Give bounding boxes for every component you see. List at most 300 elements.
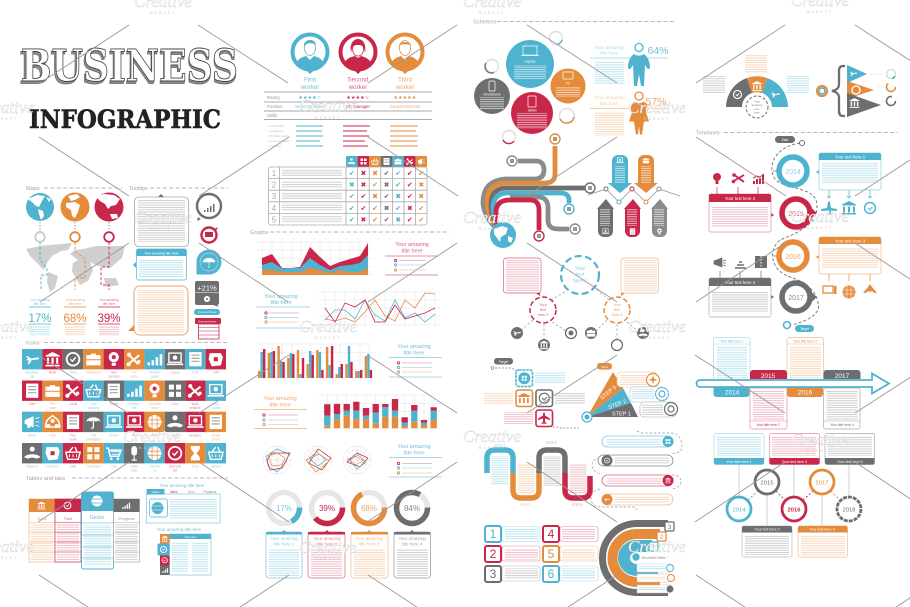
labels row 1: Idea [111, 370, 117, 374]
card 3 [351, 530, 388, 578]
triangle steps: STEP 1 [612, 412, 631, 418]
worker: first: First [304, 76, 316, 84]
row numbers: 2 [272, 180, 277, 190]
heading: Tooltips: Tooltips [129, 186, 148, 192]
box: text 4 [798, 526, 848, 557]
labels row 3: protection [86, 438, 101, 442]
watermark stamps: MARKET [644, 556, 670, 560]
labels row 4: Cart [70, 464, 76, 468]
check marks: ✖ [349, 181, 355, 189]
labels row 4: list [173, 468, 177, 472]
table grid [268, 167, 427, 225]
card 2: title here 2 [316, 542, 338, 546]
ring [817, 86, 827, 96]
watermark stamps: MARKET [315, 116, 341, 120]
dashed surround [591, 431, 682, 510]
table column: blue highlighted: Globe [90, 515, 104, 521]
donut: 68%: 68% [361, 504, 377, 513]
row numbers [272, 169, 277, 224]
snake text blocks: STEP 1 [495, 444, 506, 448]
watermark stamps: MARKET [644, 336, 670, 340]
labels row 1 [26, 370, 219, 378]
dashed circle: text 3: Your [613, 303, 622, 307]
ring 2015: 2015 [788, 211, 804, 218]
labels row 1: price [131, 374, 138, 378]
box: text 5 [825, 434, 874, 464]
row numbers: 4 [272, 204, 277, 213]
watermark stamps: Creative [628, 317, 686, 336]
start pill [775, 136, 804, 146]
check marks: ✔ [395, 170, 401, 178]
watermark stamps: Creative [463, 208, 521, 227]
worker: second: worker [348, 84, 367, 91]
radar chart 2 [304, 446, 332, 474]
callout: +21%: +21% [197, 284, 217, 292]
box: text 1: Your text here 1 [726, 460, 752, 464]
check marks: ✔ [384, 193, 390, 201]
donut: 68% [354, 492, 384, 524]
legend: area chart: title here [401, 248, 423, 254]
labels row 2: shipping [88, 406, 100, 410]
stacked bar chart [318, 395, 440, 428]
positions: Senior Designer [295, 104, 326, 109]
labels row 2: Your [213, 402, 220, 406]
check marks: ✔ [372, 204, 378, 212]
box: text 2: Your text here 2 [754, 528, 780, 532]
check marks: ✖ [418, 181, 424, 189]
check marks: ✔ [407, 170, 413, 178]
map connectors [40, 242, 109, 290]
labels row 3: News [28, 434, 36, 438]
item 1: 1 [490, 527, 497, 541]
area chart [257, 242, 373, 275]
stat: 57%: 57% [645, 96, 667, 108]
small rings [485, 32, 574, 144]
legend: line chart: Your amazing [264, 294, 298, 300]
icon row 4 [22, 443, 226, 463]
heading: Timelines: Timelines [696, 130, 720, 136]
arc number tags: 3 [668, 525, 672, 531]
panel: device circles [474, 32, 586, 144]
labels row 4: Calculator [86, 464, 102, 468]
panel: numbered list [485, 526, 598, 582]
legend: stacked chart [254, 396, 307, 428]
card 4 [394, 530, 430, 578]
labels row 3: Smart [212, 434, 220, 438]
labels row 2: Wallet [110, 402, 118, 406]
item 4: 4 [548, 527, 555, 541]
heading: Maps: Maps [26, 186, 40, 192]
watermark stamps: Creative [299, 317, 357, 336]
worker table labels: Position [267, 104, 283, 109]
labels row 1: Time [70, 370, 77, 374]
year 2017 tab: 2017 [835, 373, 850, 380]
legend: line chart [256, 294, 310, 328]
check marks: ✔ [418, 204, 424, 212]
labels row 4: Discount [169, 464, 181, 468]
donut: 39%: 39% [319, 504, 335, 513]
heading: Icons: Icons [26, 340, 40, 346]
labels row 3: Gold [49, 434, 56, 438]
row text [282, 169, 342, 222]
label: orange pill [597, 363, 612, 370]
panel: maps [26, 192, 125, 336]
labels row 1: percent [109, 374, 119, 378]
box: text 2 [742, 526, 792, 557]
watermark stamps: MARKET [315, 336, 341, 340]
worker: second [340, 34, 376, 91]
vertical tabs [157, 527, 211, 575]
snake text blocks: STEP 3 [546, 441, 557, 445]
pill: blue [602, 436, 674, 447]
pill: orange [602, 494, 673, 505]
row numbers: 1 [272, 169, 277, 178]
node 2015: 2015 [761, 480, 773, 486]
check marks: ✔ [407, 193, 413, 201]
box: title 4: Your title here 4 [830, 423, 854, 427]
icons: gray [714, 256, 767, 278]
worker table labels: Rating [267, 95, 280, 100]
skills labels: • Problem solving [268, 134, 290, 138]
title: Infographic: INFOGRAPHIC [29, 105, 221, 134]
item 5: 5 [548, 547, 555, 561]
dashed route [772, 143, 818, 325]
box: title 2 [750, 388, 787, 429]
watermark stamps: MARKET [479, 446, 505, 450]
arrow: orange down [634, 155, 658, 193]
positions [295, 104, 421, 109]
labels row 2: result [151, 406, 159, 410]
box: text 5: Your text here 5 [837, 460, 863, 464]
box: text 1 [714, 434, 764, 464]
icon: blue umbrella bubble [196, 250, 222, 274]
check marks: ✖ [407, 204, 413, 212]
year 2016 tab [787, 387, 823, 397]
dashed inner circle: here [754, 110, 760, 114]
worker: first [292, 34, 328, 91]
labels row 1: ATM [192, 370, 199, 374]
panel: tooltips [128, 194, 222, 339]
labels row 2: Statistic [128, 402, 140, 406]
labels row 3 [28, 434, 221, 442]
stat: 39%: Your amazing [99, 298, 119, 302]
labels row 3: Your [70, 434, 77, 438]
labels row 1: Laptop [170, 370, 180, 374]
arch icons [733, 81, 780, 99]
heading: Tooltips [129, 186, 228, 192]
legend: bar chart [389, 344, 442, 377]
circle: laptop: Laptop [524, 60, 536, 64]
donut: 84%: 84% [404, 504, 420, 513]
check marks: ✔ [360, 193, 366, 201]
triangle orange [847, 81, 874, 99]
labels row 3: The [91, 434, 96, 438]
heading: Tables and tabs: Tables and tabs [26, 476, 65, 482]
connectors [739, 464, 849, 526]
triangle gray [847, 93, 881, 117]
item 2: 2 [490, 547, 497, 561]
skills labels: • Leadership [268, 129, 284, 133]
labels row 3: Analysis [189, 434, 201, 438]
worker: third [388, 34, 422, 91]
circle: tablet: Tablet [527, 108, 537, 112]
world map [26, 243, 125, 292]
horizontal tabs: Progress [204, 490, 217, 494]
card 1: title here 1 [273, 542, 295, 546]
check marks: ✔ [395, 204, 401, 212]
icon: gray chart bubble [197, 194, 221, 221]
title: orange person [590, 95, 668, 136]
gray icon nodes [511, 327, 649, 351]
arc number tags [649, 522, 674, 551]
circle: smartphone: Smartphone [483, 92, 501, 96]
labels row 4: us [153, 468, 157, 472]
legend: radar charts: Your amazing [397, 444, 431, 450]
radar chart 3 [343, 446, 371, 474]
step note 2 [630, 387, 668, 402]
stat: 17%: Your amazing [30, 298, 50, 302]
stat: 39% [97, 298, 121, 336]
dashed circle: text 3 [604, 297, 630, 323]
legend: bar chart: Your amazing [397, 344, 431, 350]
ratings [298, 95, 417, 101]
year 2017 tab [824, 370, 860, 380]
table column: blue highlighted [82, 492, 114, 569]
icon: red globe [94, 192, 124, 222]
legend: line chart: title here [270, 300, 292, 306]
table column: orange [29, 499, 55, 562]
check marks: ✔ [395, 181, 401, 189]
dashed circle: text 1 [561, 256, 599, 294]
ring 2016: 2016 [785, 254, 801, 261]
dashed inner circle [746, 96, 768, 118]
dashed circle: text 2: text [540, 308, 547, 312]
ratings: ★★★★☆ [298, 95, 322, 101]
ring 2014 [773, 157, 807, 185]
watermark stamps: Creative [123, 427, 181, 446]
labels row 4: Basket [211, 464, 221, 468]
icon row 3 [22, 412, 226, 432]
check marks: ✖ [384, 181, 390, 189]
vertical tabs: Your text [184, 535, 196, 539]
labels row 2: Credit [69, 402, 77, 406]
worker: third: worker [395, 84, 414, 91]
skills labels: • Leadership [268, 124, 284, 128]
labels row 3: book [70, 438, 77, 442]
panel: brace scheme [817, 65, 896, 117]
donut: 84% [396, 492, 428, 524]
arch segments [726, 76, 788, 107]
labels row 1: Gift [214, 370, 219, 374]
center label: Your text here [641, 555, 667, 560]
node 2016: 2016 [788, 508, 801, 514]
snake text blocks: STEP 4 [572, 503, 583, 507]
title: blue person: title here [600, 50, 619, 56]
check marks [349, 170, 424, 224]
dashed inner circle: amazing [752, 103, 763, 107]
panel: nested arcs [602, 522, 674, 593]
labels row 4: Service [150, 464, 161, 468]
ring: triangle start [582, 412, 592, 422]
title: orange person: title here [600, 101, 619, 107]
node 2017: 2017 [816, 480, 828, 486]
labels row 2: Your [90, 402, 98, 406]
stat: 64%: 64% [647, 45, 669, 57]
check marks: ✔ [418, 170, 424, 178]
watermark stamps: Creative [628, 537, 686, 556]
snake text blocks [492, 441, 586, 507]
stat: 17% [28, 298, 52, 336]
skills labels: • Creativity [268, 144, 282, 148]
box: orange note [621, 258, 658, 296]
dashed circle: text 1: Your [575, 266, 586, 272]
legend: radar charts [389, 444, 442, 477]
dashed circle: text 1: here 1 [573, 278, 587, 284]
node 2014 [727, 497, 751, 521]
check marks: ✔ [418, 216, 424, 224]
positions: HR Manager [346, 104, 370, 109]
worker: first: worker [300, 84, 319, 91]
start pill: Start [782, 138, 788, 142]
box: text 1 [816, 153, 881, 190]
map rings [35, 222, 114, 242]
box: title 1 [714, 338, 750, 380]
box: title 4 [824, 388, 860, 429]
snake text blocks: STEP 2 [520, 503, 531, 507]
heading: Graphs: Graphs [250, 230, 269, 236]
watermark stamps: Creative [463, 427, 521, 446]
arrow: blue down [608, 155, 632, 193]
watermark stamps: MARKET [479, 11, 505, 15]
check marks: ✖ [360, 181, 366, 189]
step note 1 [640, 402, 678, 417]
tooltip: gray box [134, 194, 188, 246]
check marks: ✔ [349, 216, 355, 224]
labels row 1: Bank [49, 370, 57, 374]
block: blue [516, 370, 565, 386]
stat: 68%: title here [69, 302, 81, 306]
worker table lines [264, 92, 432, 120]
worker table labels: Skills [267, 113, 278, 118]
stat: 68%: 68% [63, 313, 87, 325]
worker: second: Second [348, 76, 369, 84]
labels row 4: Discount [46, 464, 59, 468]
card 1 [266, 530, 302, 578]
ring 2017 [782, 283, 816, 311]
node 2014: 2014 [733, 508, 746, 514]
panel: icon grid [22, 349, 226, 472]
card 2: Your amazing [313, 536, 341, 541]
check marks: ✔ [372, 216, 378, 224]
box: title 2: Your title here 2 [756, 423, 780, 427]
check marks: ✖ [360, 216, 366, 224]
node 2018 [837, 497, 861, 521]
box: title 3 [787, 338, 824, 380]
watermark stamps: MARKET [479, 227, 505, 231]
labels row 1: graph [151, 374, 159, 378]
title: Business: BUSINESS [19, 44, 238, 94]
icon: pipes globe [490, 222, 516, 248]
table column: red: Time [64, 516, 73, 521]
labels row 2: Success [149, 402, 161, 406]
panel: pipes [483, 146, 585, 232]
arrow: red up [624, 199, 641, 237]
horizontal tabs: Bank [170, 490, 178, 494]
panel: workers [264, 34, 432, 148]
node 2016 [782, 497, 806, 521]
check marks: ✖ [372, 170, 378, 178]
table column: orange: Bank [37, 516, 47, 521]
node 2017 [810, 470, 834, 494]
labels row 2: Multi [192, 402, 199, 406]
panel: target blocks [484, 358, 678, 428]
watermark stamps: Creative [299, 96, 357, 115]
check marks: ✔ [407, 216, 413, 224]
labels row 4: Voice [130, 464, 138, 468]
box: text 3 [816, 237, 881, 274]
watermark stamps: Creative [791, 207, 849, 226]
ring 2015 [782, 199, 816, 227]
legend: stacked chart: title here [269, 402, 291, 408]
labels row 2: network [189, 406, 201, 410]
heading: Maps [26, 186, 122, 192]
pipe end rings [507, 134, 595, 241]
watermark stamps: MARKET [807, 226, 833, 230]
labels row 4: Time [192, 464, 199, 468]
legend: area chart: Your amazing [395, 242, 429, 248]
connector dots [748, 491, 840, 500]
labels row 3: phone [212, 438, 221, 442]
icons: blue [821, 190, 876, 214]
table header icons [346, 156, 427, 167]
box: red note [504, 258, 541, 296]
positions: General Director [390, 104, 421, 109]
small red table [195, 318, 221, 339]
icon: red ring [202, 227, 218, 242]
block: gray [536, 390, 585, 406]
check marks: ✖ [418, 193, 424, 201]
title: blue person: Your amazing [594, 45, 624, 51]
horizontal tabs [146, 483, 220, 523]
box: text 2: Your text here 2 [725, 196, 756, 201]
legend: stacked chart: Your amazing [263, 396, 297, 402]
pill: gray [598, 455, 673, 466]
circle: PC: PC [566, 82, 571, 86]
icon row 1 [22, 349, 226, 369]
dashed inner circle: Your [754, 100, 760, 104]
labels row 1: Business [26, 370, 39, 374]
icons: red [713, 173, 764, 194]
scheme connectors [521, 289, 638, 339]
icon row 2 [22, 380, 226, 401]
donut: 39% [312, 492, 342, 524]
panel: snake path [487, 450, 590, 498]
title: Business: BUSINESS [21, 41, 238, 92]
dashed circle: text 3: text [614, 308, 621, 312]
legend: area chart [385, 242, 438, 275]
year 2014 tab [714, 387, 750, 397]
brace [832, 66, 845, 116]
check marks: ✖ [372, 193, 378, 201]
year 2016 tab: 2016 [798, 390, 813, 396]
skills labels [268, 124, 290, 148]
label: target: Target [499, 360, 508, 364]
check marks: ✔ [349, 204, 355, 212]
arc number tags: 1 [652, 545, 656, 551]
check marks: ✔ [372, 181, 378, 189]
arch notes [703, 55, 809, 93]
labels row 4: Ideas to [26, 464, 38, 468]
